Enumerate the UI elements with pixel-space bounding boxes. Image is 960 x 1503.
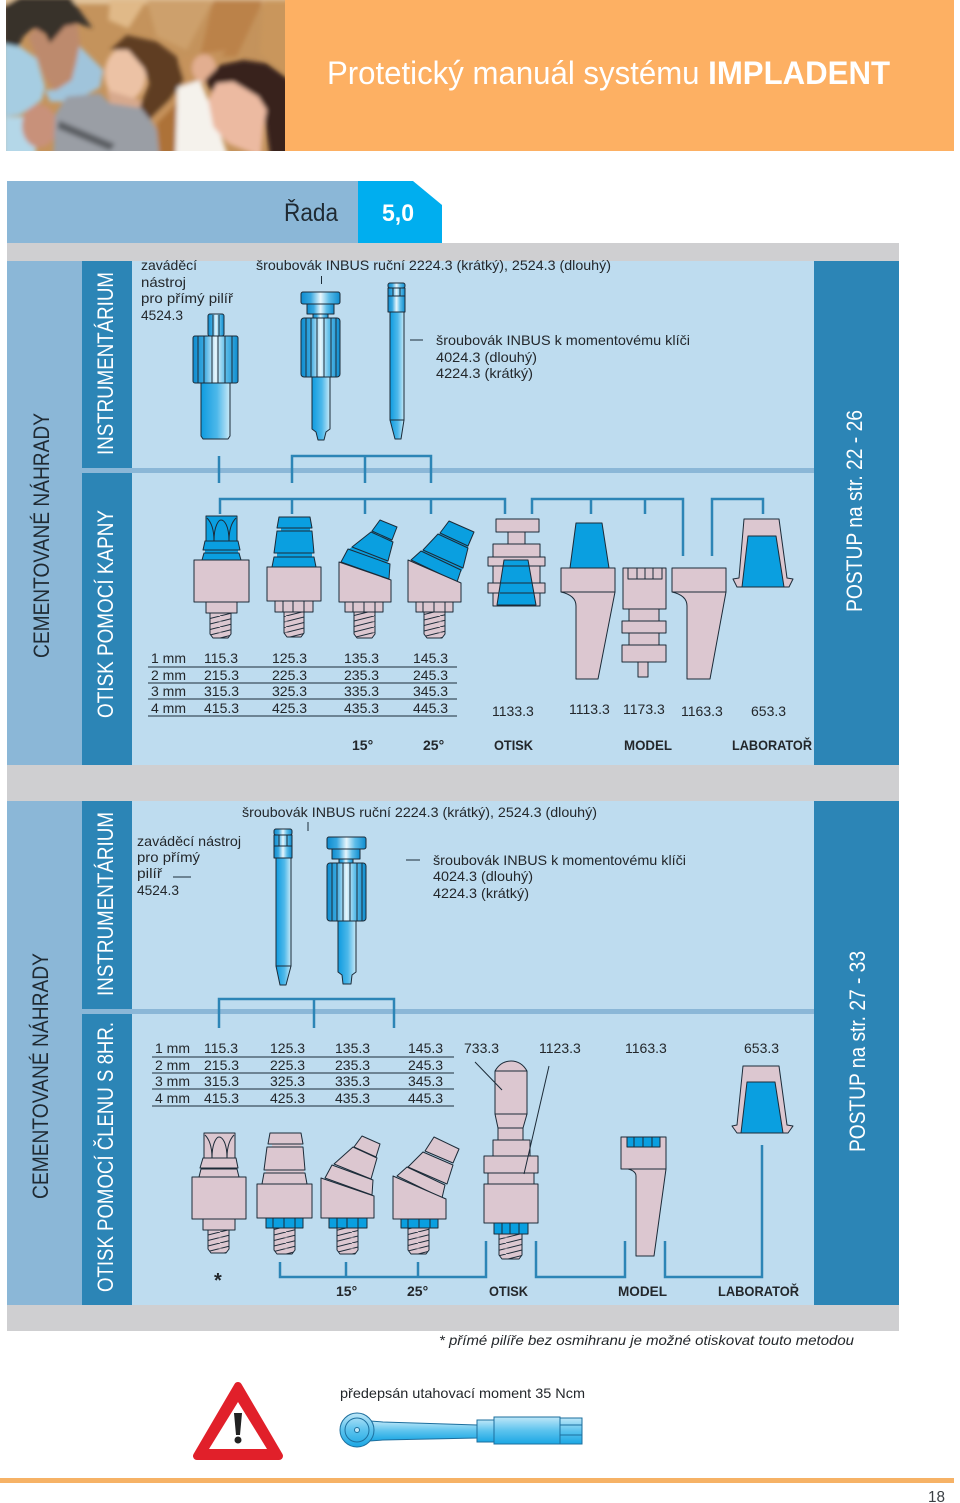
column labels section 1: OTISK — [494, 737, 533, 753]
table: section 1 codes: 115.3 — [204, 650, 238, 666]
side label: postup 27-33: POSTUP na str. 27 - 33 — [845, 951, 870, 1152]
table: section 1 codes: 335.3 — [344, 683, 379, 699]
table: section 1 codes: 315.3 — [204, 683, 239, 699]
table: section 2 codes: 415.3 — [204, 1090, 239, 1106]
table: section 2 codes: 135.3 — [335, 1040, 370, 1056]
codes: section 2 right — [464, 1040, 779, 1056]
table: section 2 codes: 315.3 — [204, 1073, 239, 1089]
column labels section 1: LABORATOŘ — [732, 736, 812, 753]
table: section 2 codes: 4 mm — [155, 1090, 190, 1106]
leader dash 2 — [406, 859, 420, 861]
series label: Řada — [284, 198, 338, 227]
table: section 1 codes: 445.3 — [413, 700, 448, 716]
text: šroubovák k momentovému klíči 2: 4024.3 (dlouhý) — [433, 868, 533, 884]
table: section 1 codes: 125.3 — [272, 650, 307, 666]
grey band middle — [7, 765, 899, 801]
asterisk note marker: * — [214, 1270, 222, 1292]
laboratory cap 653.3 section 2 — [732, 1066, 793, 1133]
connector brackets upper, section 1 — [219, 456, 763, 556]
codes: section 1 right: 1133.3 — [492, 703, 534, 719]
table: section 1 codes: 4 mm — [151, 700, 186, 716]
table: section 2 codes: 125.3 — [270, 1040, 305, 1056]
table: section 2 codes — [152, 1040, 454, 1106]
column labels section 1: 15° — [352, 737, 373, 753]
grey band top — [7, 243, 899, 261]
table: section 2 codes: 115.3 — [204, 1040, 238, 1056]
table: section 1 codes: 325.3 — [272, 683, 307, 699]
table: section 2 codes: 215.3 — [204, 1057, 239, 1073]
leader tick 2 — [307, 822, 309, 831]
icon: long driver 2 — [274, 829, 292, 985]
icon: insertion tool 4524.3 — [193, 314, 238, 439]
table: section 1 codes: 3 mm — [151, 683, 186, 699]
series header: Řada — [7, 181, 358, 243]
table: section 1 codes: 435.3 — [344, 700, 379, 716]
icon: hand driver 2 — [327, 837, 366, 984]
codes: section 2 right: 1163.3 — [625, 1040, 667, 1056]
model part 1173.3 — [622, 568, 666, 677]
table: section 1 codes — [148, 650, 457, 716]
icon: torque wrench — [340, 1413, 582, 1447]
table: section 1 codes: 235.3 — [344, 667, 379, 683]
codes: section 2 right: 733.3 — [464, 1040, 499, 1056]
title: Protetický manuál systému IMPLADENT — [327, 55, 890, 91]
icon: long driver for torque wrench — [388, 283, 405, 439]
footnote: * přímé pilíře bez osmihranu je možné otiskovat touto metodou — [439, 1332, 854, 1348]
codes: section 2 right: 653.3 — [744, 1040, 779, 1056]
table: section 2 codes: 1 mm — [155, 1040, 190, 1056]
abutment 135 with octagon, 15 degrees — [321, 1136, 380, 1254]
series value: 5,0 — [382, 200, 414, 227]
series value tab — [358, 181, 442, 243]
icon: warning triangle — [197, 1386, 279, 1456]
connector bracket section 2 — [219, 999, 394, 1028]
side label: instrumentárium 2: INSTRUMENTÁRIUM — [93, 812, 118, 996]
abutment 125 with octagon — [257, 1133, 312, 1254]
column labels section 2: 15° — [336, 1283, 357, 1299]
text: šroubovák k momentovému klíči 2: šroubovák INBUS k momentovému klíči — [433, 852, 686, 868]
column labels section 2: MODEL — [618, 1283, 667, 1299]
text: zaváděcí nástroj 2 — [137, 833, 241, 898]
leader tick — [320, 276, 322, 284]
text: zaváděcí nástroj: nástroj — [141, 274, 186, 290]
side label: cementované náhrady 1: CEMENTOVANÉ NÁHRADY — [29, 413, 54, 658]
icon: hand driver — [301, 292, 340, 440]
text: šroubovák k momentovému klíči: 4024.3 (dlouhý) — [436, 349, 537, 365]
leader lines — [475, 1062, 549, 1174]
text: šroubovák k momentovému klíči 2: 4224.3 (krátký) — [433, 885, 529, 901]
leader dash — [410, 339, 423, 341]
text: zaváděcí nástroj 2: pilíř — [137, 865, 162, 881]
impression post 733.3 with abutment 1123.3 — [484, 1061, 538, 1259]
panel: section 2 — [7, 801, 899, 1305]
table: section 1 codes: 1 mm — [151, 650, 186, 666]
text: zaváděcí nástroj 2: pro přímý — [137, 849, 200, 865]
codes: section 2 right: 1123.3 — [539, 1040, 581, 1056]
table: section 1 codes: 245.3 — [413, 667, 448, 683]
model part 1163.3 section 2 — [621, 1137, 666, 1256]
table: section 2 codes: 445.3 — [408, 1090, 443, 1106]
abutment 115.3 — [194, 516, 249, 638]
table: section 1 codes: 415.3 — [204, 700, 239, 716]
laboratory cap 653.3 — [733, 519, 793, 587]
codes: section 1 right: 653.3 — [751, 703, 786, 719]
text: zaváděcí nástroj 2: zaváděcí nástroj — [137, 833, 241, 849]
table: section 2 codes: 435.3 — [335, 1090, 370, 1106]
table: section 1 codes: 225.3 — [272, 667, 307, 683]
table: section 2 codes: 325.3 — [270, 1073, 305, 1089]
column labels section 2: OTISK — [489, 1283, 528, 1299]
column labels section 1: 25° — [423, 737, 444, 753]
text: zaváděcí nástroj: pro přímý pilíř — [141, 290, 233, 306]
torque note: předepsán utahovací moment 35 Ncm — [340, 1385, 585, 1401]
table: section 1 codes: 145.3 — [413, 650, 448, 666]
side label: otisk pomocí kapny: OTISK POMOCÍ KAPNY — [93, 510, 118, 718]
abutment 145.3, 25 degrees — [408, 521, 474, 638]
text: zaváděcí nástroj 2: 4524.3 — [137, 882, 179, 898]
table: section 2 codes: 3 mm — [155, 1073, 190, 1089]
connector brackets section 2 bottom — [280, 1145, 762, 1277]
table: section 1 codes: 215.3 — [204, 667, 239, 683]
header banner — [285, 0, 954, 151]
table: section 2 codes: 225.3 — [270, 1057, 305, 1073]
table: section 2 codes: 425.3 — [270, 1090, 305, 1106]
abutment straight, no octagon — [192, 1133, 246, 1253]
codes: section 1 right: 1173.3 — [623, 701, 665, 717]
abutment 135.3, 15 degrees — [339, 520, 397, 638]
text: šroubovák k momentovému klíči: šroubovák INBUS k momentovému klíči — [436, 332, 690, 348]
table: section 2 codes: 235.3 — [335, 1057, 370, 1073]
column labels section 2: 25° — [407, 1283, 428, 1299]
table: section 2 codes: 345.3 — [408, 1073, 443, 1089]
table: section 1 codes: 345.3 — [413, 683, 448, 699]
side label: otisk pomocí členu: OTISK POMOCÍ ČLENU S 8HR. — [93, 1022, 118, 1292]
table: section 1 codes: 425.3 — [272, 700, 307, 716]
table: section 2 codes: 2 mm — [155, 1057, 190, 1073]
panel: section 1 — [7, 261, 899, 765]
grey band bottom — [7, 1305, 899, 1331]
text: šroubovák ruční: šroubovák INBUS ruční 2224.3 (krátký), 2524.3 (dlouhý) — [256, 257, 611, 273]
table: section 2 codes: 245.3 — [408, 1057, 443, 1073]
table: section 1 codes: 2 mm — [151, 667, 186, 683]
codes: section 1 right: 1113.3 — [569, 701, 610, 717]
text: zaváděcí nástroj: zaváděcí — [141, 257, 197, 273]
codes: section 1 right — [492, 701, 786, 719]
leader dash pilíř — [173, 876, 191, 878]
side label: cementované náhrady 2: CEMENTOVANÉ NÁHRADY — [28, 953, 53, 1199]
table: section 2 codes: 335.3 — [335, 1073, 370, 1089]
abutment 145 with octagon, 25 degrees — [393, 1137, 459, 1254]
model part 1163.3 — [672, 568, 726, 679]
abutment 125.3 — [267, 517, 321, 637]
side label: postup 22-26: POSTUP na str. 22 - 26 — [842, 410, 867, 612]
column labels section 2: LABORATOŘ — [718, 1282, 799, 1299]
text: zaváděcí nástroj — [141, 257, 233, 323]
header photo: family on a wooden floor — [6, 0, 285, 151]
column labels section 1 — [352, 736, 812, 753]
text: šroubovák k momentovému klíči: 4224.3 (krátký) — [436, 365, 533, 381]
table: section 2 codes: 145.3 — [408, 1040, 443, 1056]
text: zaváděcí nástroj: 4524.3 — [141, 307, 183, 323]
column labels section 2 — [336, 1282, 799, 1299]
text: šroubovák k momentovému klíči 2 — [433, 852, 686, 901]
footer rule — [0, 1478, 954, 1483]
text: šroubovák ruční 2: šroubovák INBUS ruční 2224.3 (krátký), 2524.3 (dlouhý) — [242, 804, 597, 820]
column labels section 1: MODEL — [624, 737, 672, 753]
codes: section 1 right: 1163.3 — [681, 703, 723, 719]
impression part 1133.3 — [488, 519, 545, 606]
side label: instrumentárium 1: INSTRUMENTÁRIUM — [93, 272, 118, 455]
table: section 1 codes: 135.3 — [344, 650, 379, 666]
model part 1113.3 — [561, 523, 615, 679]
text: šroubovák k momentovému klíči — [436, 332, 690, 381]
